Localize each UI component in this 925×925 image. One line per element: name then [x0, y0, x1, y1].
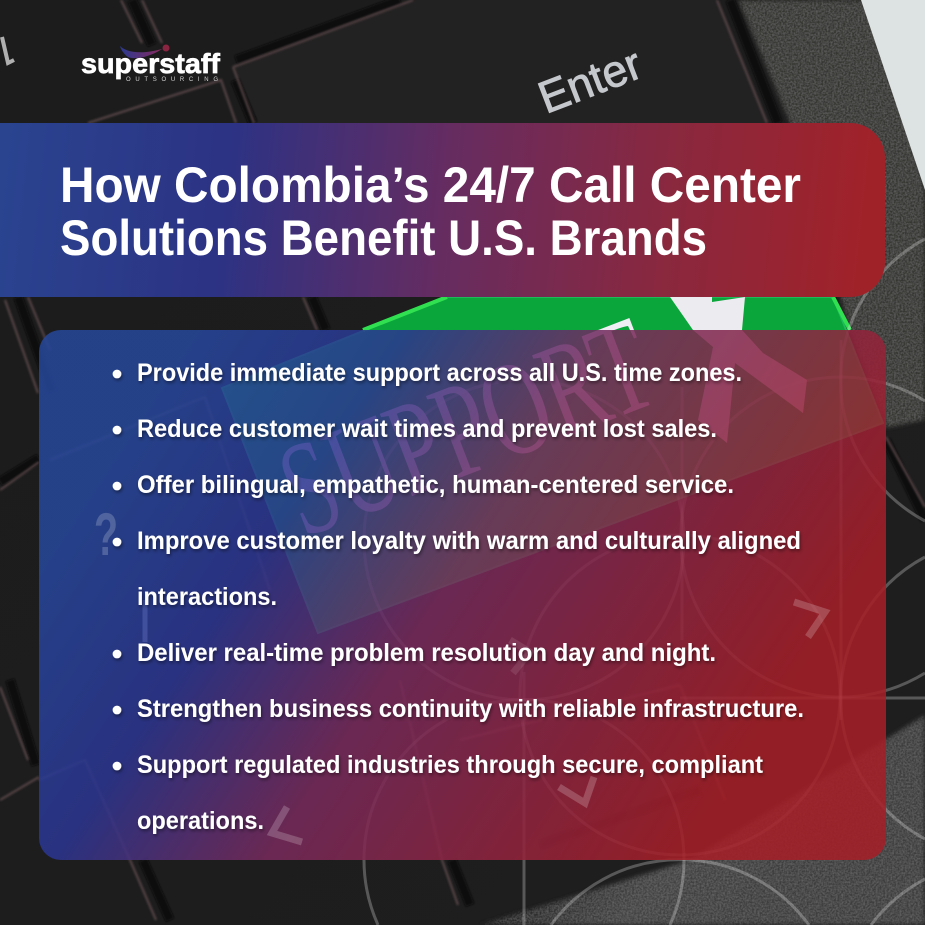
bullet 3: Offer bilingual, empathetic, human-centered service.: [137, 471, 734, 499]
bullet 5: Deliver real-time problem resolution day and night.: [137, 639, 716, 667]
bullet 4: interactions.: [137, 583, 277, 611]
logo dot: [162, 44, 170, 52]
logo wordmark: superstaff: [81, 48, 221, 79]
faint vertical glyph on key: [142, 600, 148, 642]
enter key: [233, 0, 767, 123]
decorative circle pattern: [364, 239, 925, 925]
logo subline: OUTSOURCING: [126, 77, 218, 83]
bullet 2: Reduce customer wait times and prevent lost sales.: [137, 415, 717, 443]
keyboard frame, upper right: [738, 0, 925, 428]
bullet 6: Strengthen business continuity with reliable infrastructure.: [137, 695, 804, 723]
bullet 4: [113, 527, 801, 611]
logo: superstaff outsourcing: [81, 44, 221, 83]
green support key: [222, 297, 883, 633]
SUPPORT key label: SUPPORT: [260, 289, 673, 566]
title text: Solutions Benefit U.S. Brands: [60, 210, 707, 266]
bullet 7: Support regulated industries through secure, compliant: [137, 751, 764, 779]
letter mark on neighbouring key: [2, 37, 14, 63]
bright background corner: [861, 0, 925, 190]
panel: benefits list: [39, 330, 886, 860]
bullet 7: operations.: [137, 807, 264, 835]
bright key edges: [363, 297, 850, 330]
white ribbon icon on support key: [670, 297, 807, 443]
title text: [60, 157, 801, 266]
bullet 7: [113, 751, 764, 835]
bullet list: [113, 359, 804, 835]
title text: How Colombia’s 24/7 Call Center: [60, 157, 801, 213]
bullet 1: Provide immediate support across all U.S. time zones.: [137, 359, 742, 387]
logo swoosh: [120, 46, 162, 58]
keyboard frame, lower right: [480, 715, 925, 925]
title banner: [0, 123, 885, 297]
Enter key label: Enter: [531, 38, 649, 123]
small chevrons in panel: [272, 602, 825, 842]
question mark glyph: ?: [94, 501, 118, 568]
bullet 4: Improve customer loyalty with warm and culturally aligned: [137, 527, 801, 555]
